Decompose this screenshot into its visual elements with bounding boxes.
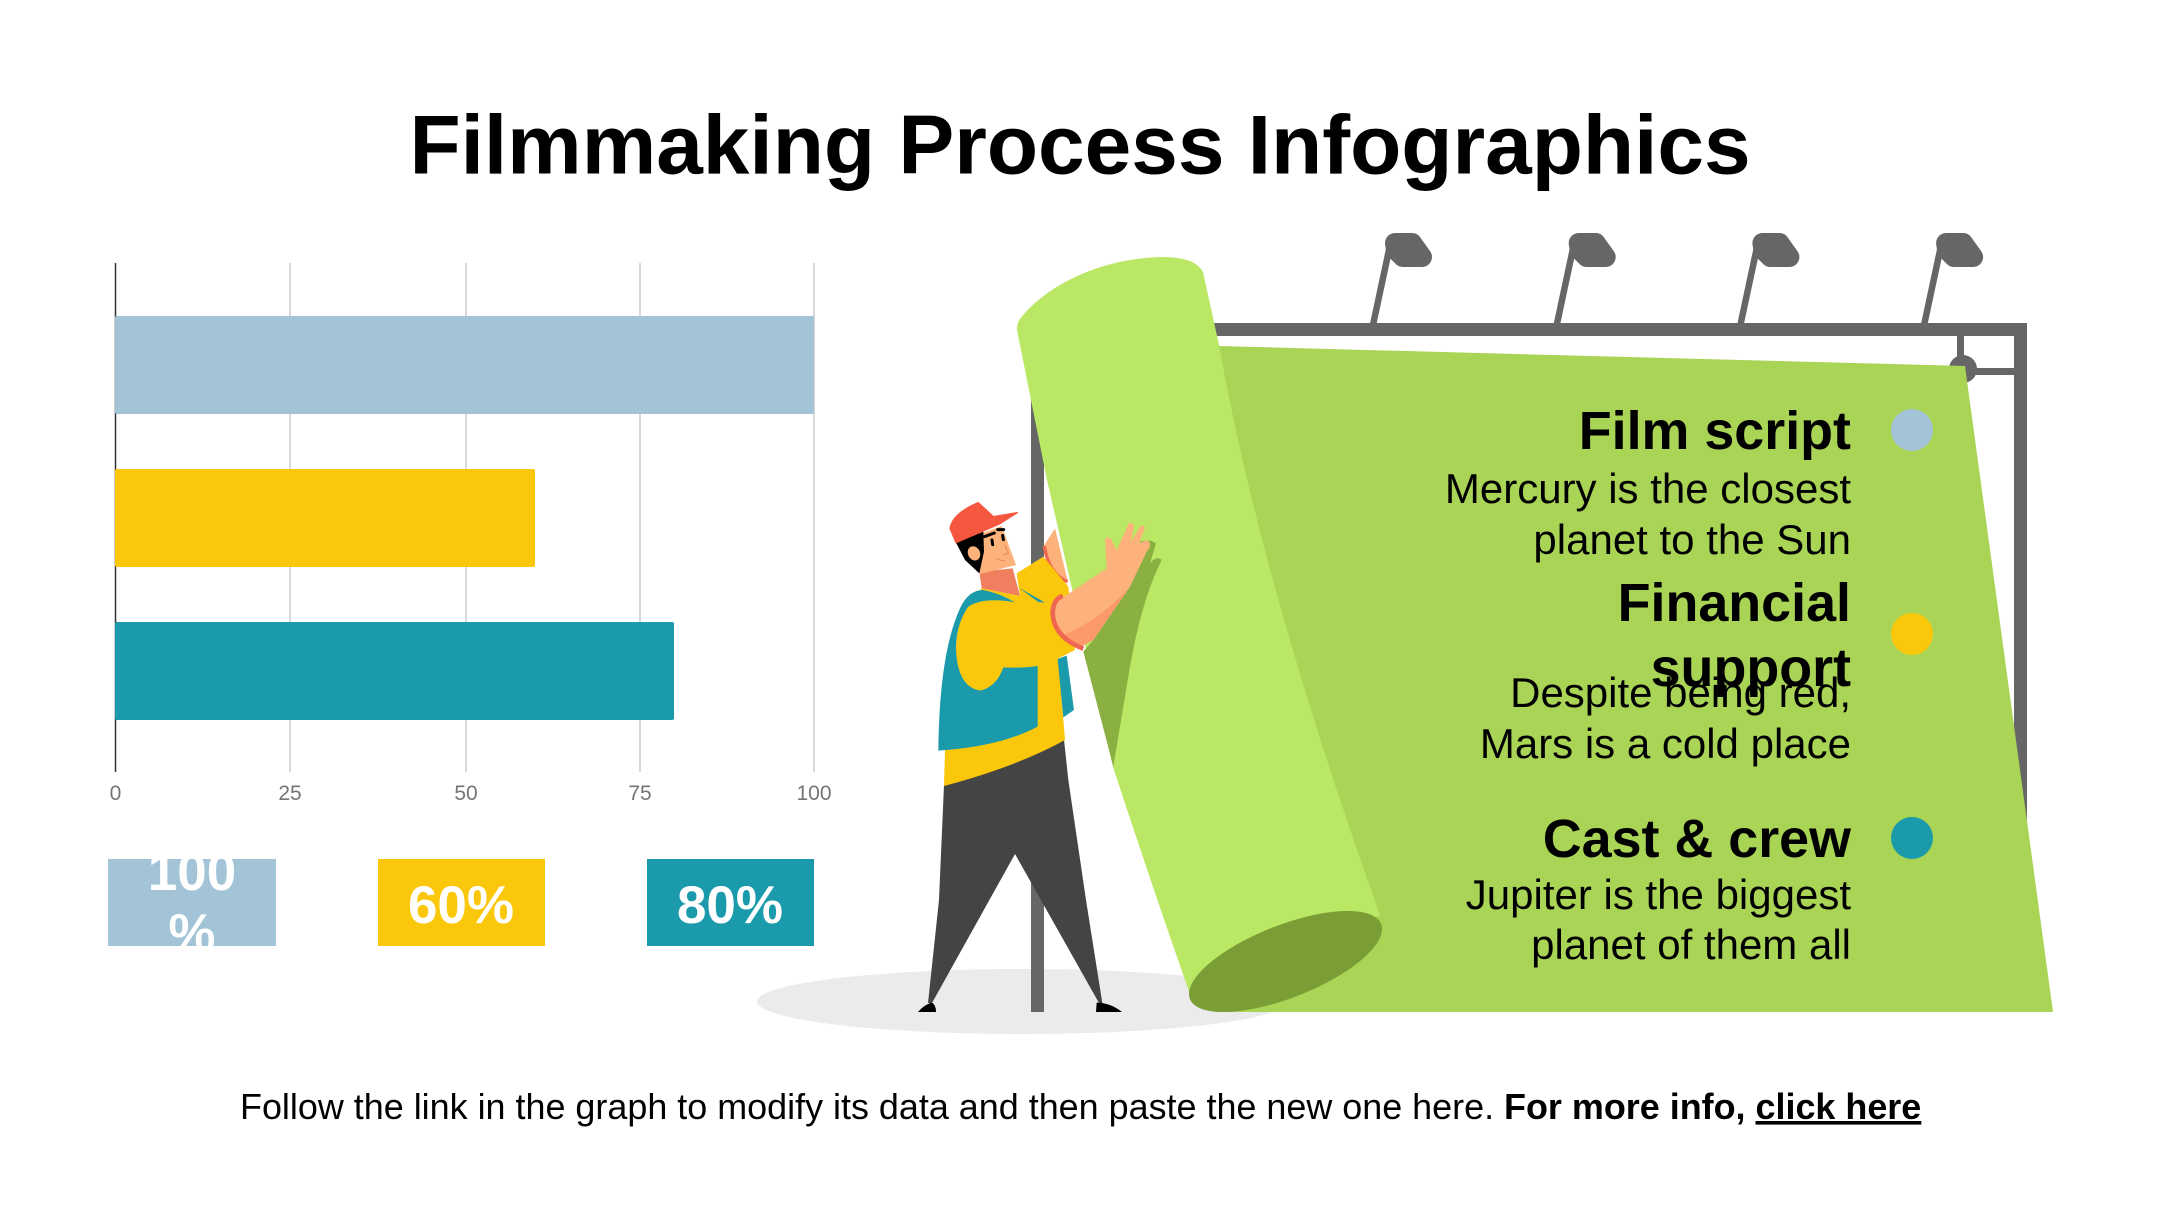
item: cast and crew: planet of them all xyxy=(1531,921,1851,968)
value box: 100%: % xyxy=(168,904,216,963)
head xyxy=(972,526,1016,574)
neck xyxy=(979,568,1020,596)
item: financial support: Financial xyxy=(1618,573,1851,633)
item: cast and crew xyxy=(1466,809,1933,968)
axis labels: 75 xyxy=(628,782,652,805)
item: financial support: Mars is a cold place xyxy=(1480,720,1851,767)
front arm and shadow xyxy=(1053,523,1162,767)
axis labels: 100 xyxy=(796,782,832,805)
ear xyxy=(965,544,983,563)
dot: cast and crew xyxy=(1891,817,1933,859)
paper roll xyxy=(1017,257,1394,1033)
item: film script: Mercury is the closest xyxy=(1445,465,1851,512)
value box: 80% xyxy=(647,859,814,946)
chart axis xyxy=(114,263,116,772)
hand shadow xyxy=(1083,540,1162,767)
axis labels: 50 xyxy=(454,782,478,805)
torso xyxy=(944,557,1075,786)
bar chart xyxy=(110,263,832,805)
sleeve cuff xyxy=(1053,596,1083,649)
value box: 60%: 60% xyxy=(408,876,514,935)
axis labels xyxy=(110,782,832,805)
item: cast and crew: Cast & crew xyxy=(1543,809,1851,869)
face details xyxy=(984,530,1004,545)
nose and mouth xyxy=(997,545,1008,561)
dot: film script xyxy=(1891,409,1933,451)
vest right panel xyxy=(1058,656,1074,717)
cap xyxy=(950,503,1017,543)
trousers xyxy=(928,733,1102,1003)
value box: 100% xyxy=(108,859,276,946)
item: film script xyxy=(1445,401,1933,563)
item: film script: Film script xyxy=(1579,401,1851,461)
vest collar xyxy=(1018,587,1045,603)
bar: financial support 60 xyxy=(115,469,535,567)
vest xyxy=(938,590,1038,751)
roll end xyxy=(1177,890,1394,1033)
billboard illustration xyxy=(757,243,2053,1034)
bar: cast and crew 80 xyxy=(115,622,674,720)
arm shade xyxy=(1065,587,1130,648)
axis labels: 25 xyxy=(278,782,302,805)
billboard lamps xyxy=(1373,243,1973,325)
footer note: Follow the link in the graph to modify its data and then paste the new one here. For more info, click here xyxy=(240,1086,1921,1127)
bar: film script 100 xyxy=(115,316,814,414)
ground shadow xyxy=(757,969,1287,1034)
right shoe xyxy=(1096,1003,1122,1012)
value box: 100%: 100 xyxy=(148,843,236,902)
dot: financial support xyxy=(1891,613,1933,655)
item: cast and crew: Jupiter is the biggest xyxy=(1466,871,1851,918)
back arm xyxy=(1043,528,1068,583)
title: Filmmaking Process Infographics xyxy=(409,98,1751,192)
item: film script: planet to the Sun xyxy=(1533,516,1851,563)
item: financial support xyxy=(1480,573,1933,767)
chart grid lines xyxy=(290,263,814,772)
billboard frame xyxy=(1031,323,2027,1012)
value box: 60% xyxy=(378,859,545,946)
left shoe xyxy=(918,1003,936,1012)
value box: 80%: 80% xyxy=(677,876,783,935)
hair xyxy=(956,532,984,573)
axis labels: 0 xyxy=(110,782,121,805)
item: financial support: support xyxy=(1651,638,1851,698)
sign sheet xyxy=(1215,346,2053,1012)
person body xyxy=(918,503,1122,1012)
front arm xyxy=(1055,523,1150,648)
item: financial support: Despite being red, xyxy=(1510,669,1851,716)
